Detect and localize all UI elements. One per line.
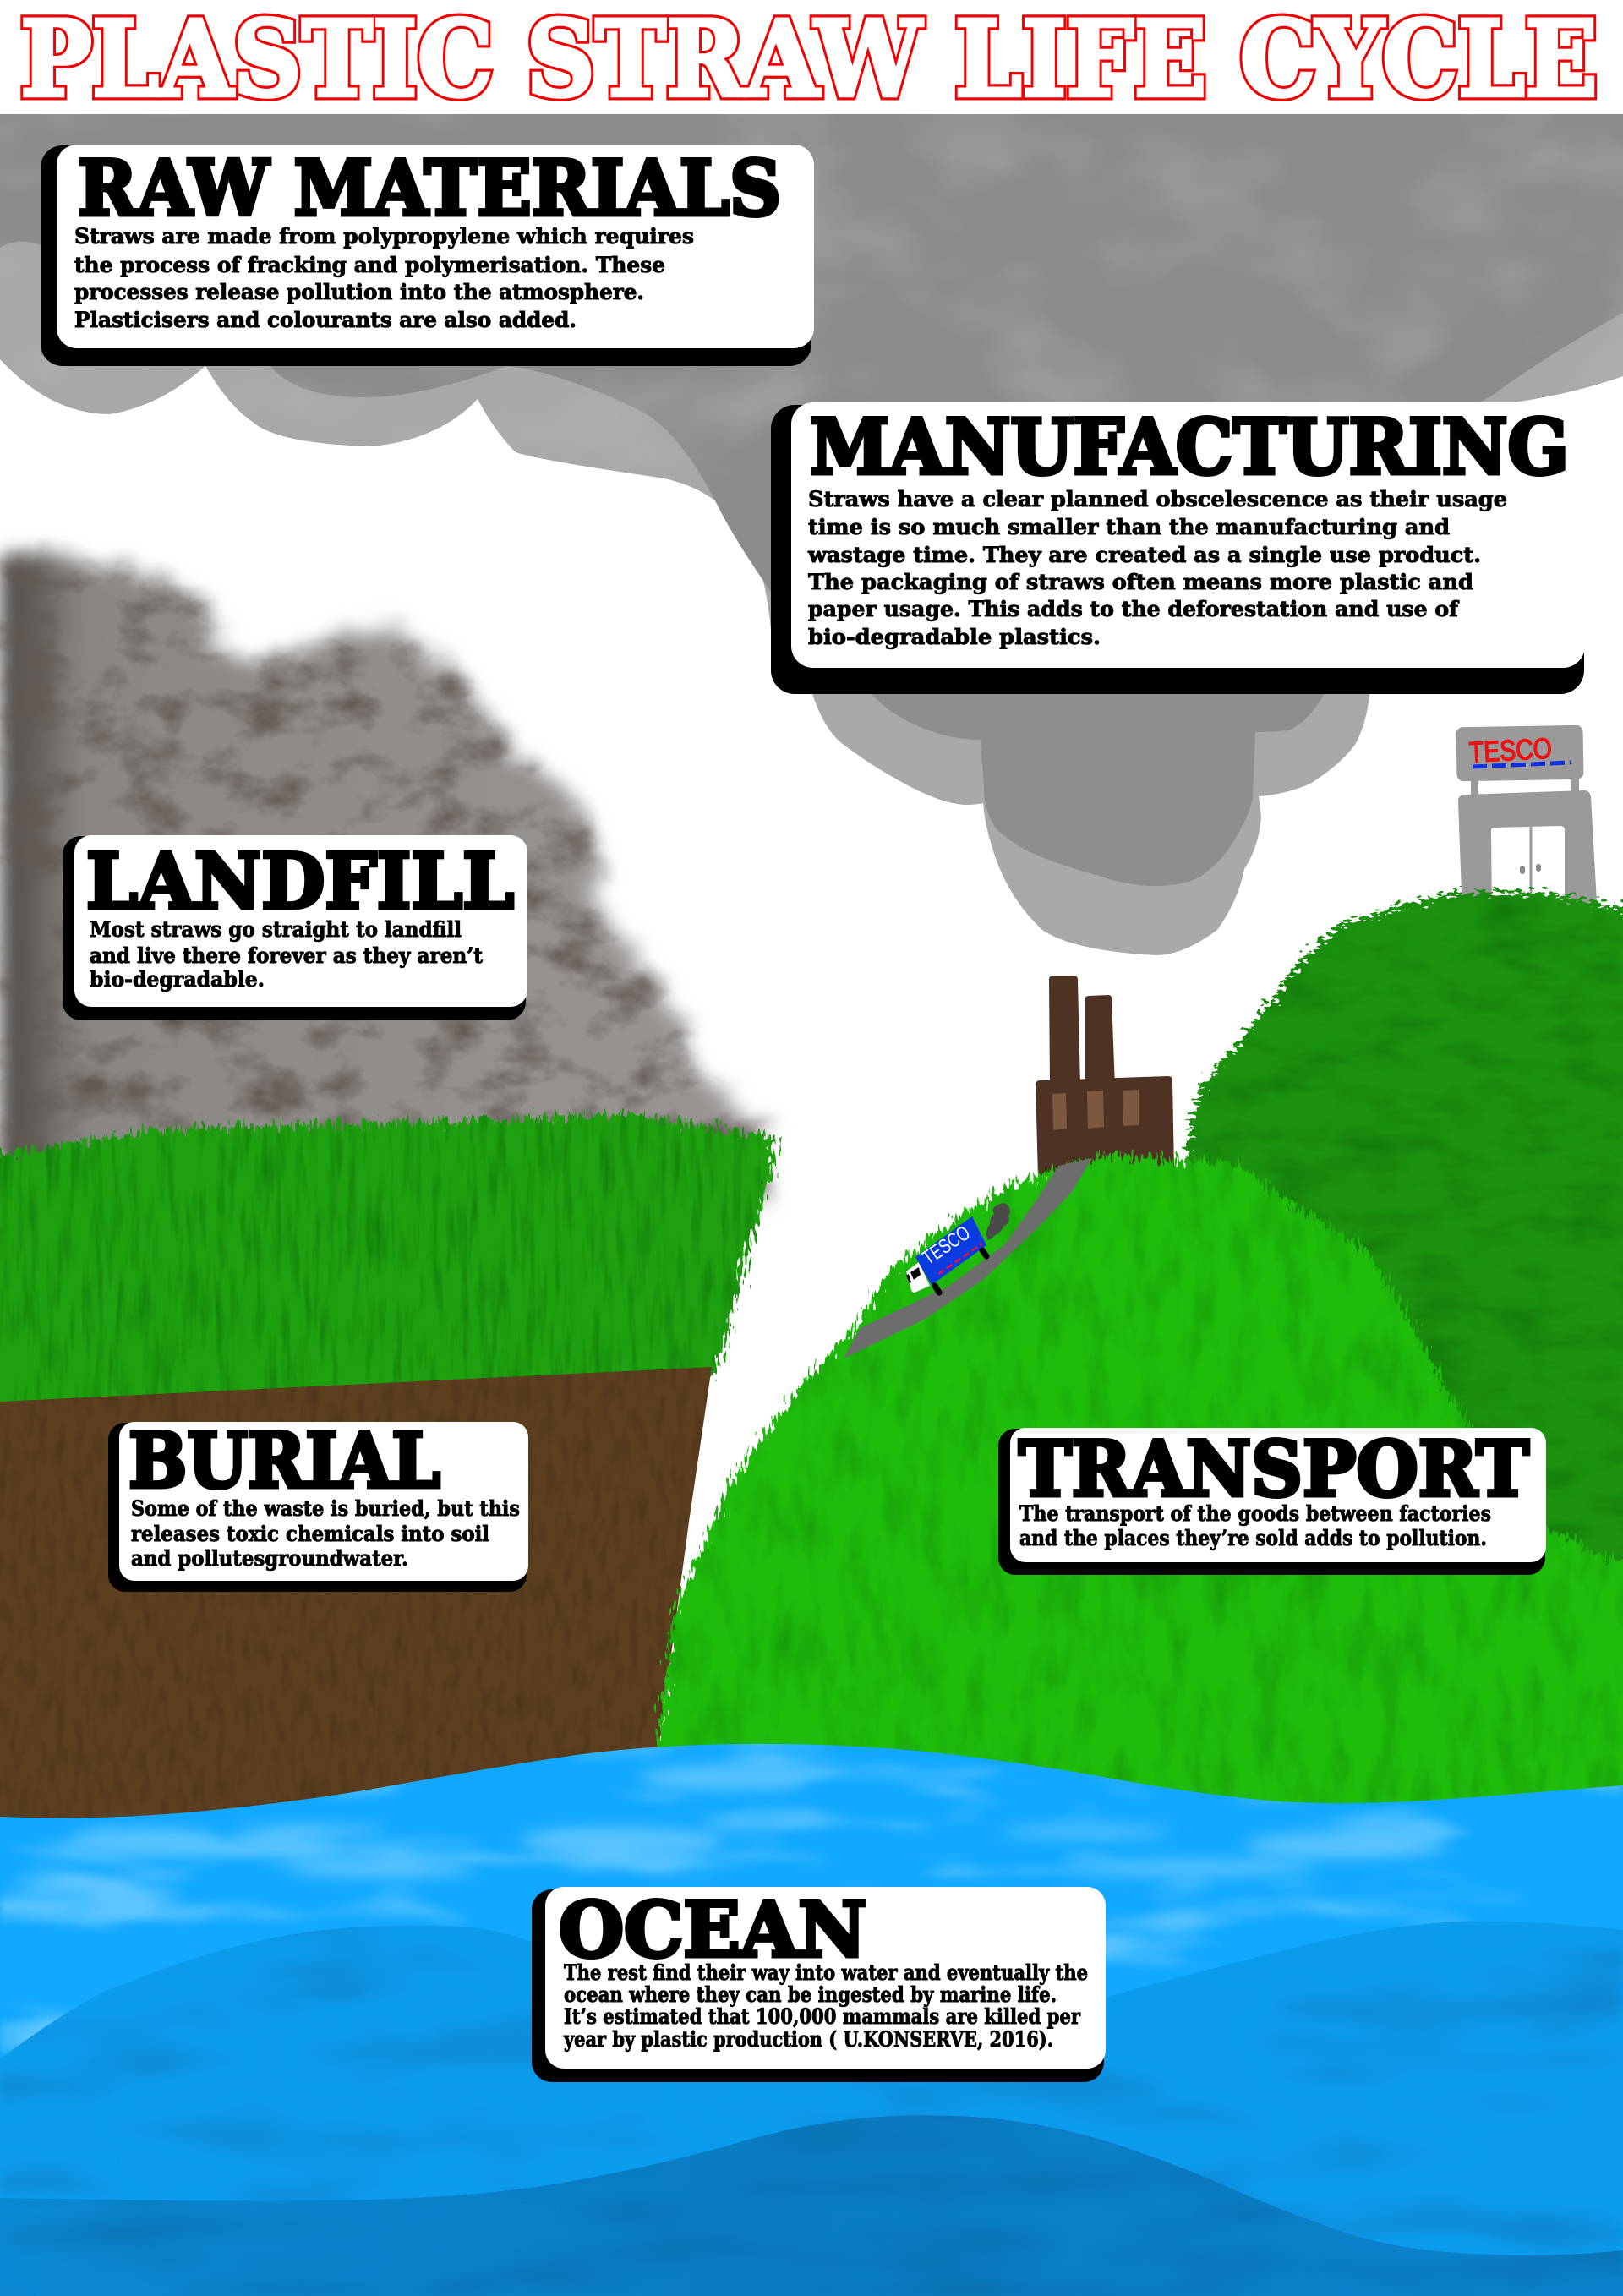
body text: releases toxic chemicals into soil (131, 1522, 489, 1546)
card face (57, 145, 814, 348)
landfill smoke cloud (0, 551, 765, 1200)
heading: BURIAL (128, 1416, 440, 1506)
heading: OCEAN (559, 1885, 866, 1975)
lower pollution cloud, dark layer (857, 676, 1333, 886)
truck wheels (935, 1250, 986, 1293)
body text: ocean where they can be ingested by marine life. (564, 1982, 1057, 2007)
chimney right (1085, 995, 1115, 1086)
body text: and the places they’re sold adds to pollution. (1019, 1526, 1487, 1550)
cab window (906, 1267, 921, 1283)
band background (0, 0, 1623, 114)
card face (74, 835, 527, 1007)
body text: and live there forever as they aren’t (90, 943, 483, 968)
body text: and pollutesgroundwater. (131, 1546, 408, 1571)
card shadow (532, 1889, 1104, 2082)
body text: The rest find their way into water and eventually the (564, 1960, 1088, 1985)
card shadow (771, 405, 1584, 694)
store sign (1456, 725, 1584, 781)
front hill (655, 1155, 1623, 1834)
card shadow (63, 836, 526, 1020)
body text: Plasticisers and colourants are also added. (74, 308, 577, 332)
body text: It’s estimated that 100,000 mammals are killed per (564, 2004, 1081, 2029)
ocean mid wave (0, 1921, 1623, 2296)
card shadow (41, 145, 812, 366)
body text: wastage time. They are created as a single use product. (807, 543, 1481, 567)
heading: MANUFACTURING (810, 402, 1569, 492)
road (844, 1158, 1092, 1358)
body text (1019, 1501, 1491, 1550)
truck trailer (915, 1216, 986, 1285)
body text: the process of fracking and polymerisation. These (74, 253, 665, 277)
body text: processes release pollution into the atmosphere. (74, 280, 644, 304)
icon: delivery truck (906, 1203, 1010, 1293)
card face (1010, 1428, 1546, 1562)
panel: ocean (532, 1885, 1106, 2082)
card shadow (998, 1429, 1545, 1575)
body text: The transport of the goods between factories (1019, 1501, 1491, 1526)
factory windows (1052, 1090, 1139, 1130)
icon: tesco store (1456, 725, 1598, 917)
body text (563, 1960, 1088, 2052)
door split (1530, 827, 1532, 917)
icon: factory (1036, 976, 1174, 1177)
heading: LANDFILL (86, 837, 514, 927)
top pollution cloud, dark layer (0, 114, 1623, 676)
store logo stripe (1473, 763, 1571, 767)
store logo text: TESCO (1468, 733, 1553, 769)
card face (791, 402, 1585, 668)
heading: TRANSPORT (1019, 1424, 1529, 1514)
top pollution cloud, light layer (0, 114, 1623, 676)
store sign posts (1471, 778, 1579, 797)
body text: year by plastic production ( U.KONSERVE, 2016). (563, 2027, 1053, 2052)
exhaust smoke (986, 1203, 1010, 1239)
body text: The packaging of straws often means more plastic and (808, 570, 1473, 594)
panel: burial (108, 1416, 528, 1592)
body text (74, 224, 694, 332)
body text: Straws have a clear planned obscelescence as their usage (808, 487, 1507, 511)
truck cab (906, 1262, 930, 1293)
body text: Straws are made from polypropylene which requires (74, 224, 694, 249)
body text: bio-degradable plastics. (808, 625, 1101, 649)
panel: transport (998, 1424, 1546, 1575)
truck logo text: TESCO (918, 1222, 975, 1270)
card shadow (108, 1423, 527, 1592)
heading: RAW MATERIALS (78, 144, 781, 233)
card face (119, 1422, 528, 1581)
body text: time is so much smaller than the manufacturing and (808, 515, 1450, 539)
body text: paper usage. This adds to the deforestation and use of (808, 597, 1460, 621)
truck logo stripe (938, 1244, 982, 1274)
ocean deep wave (0, 2115, 1623, 2296)
panel: landfill (63, 835, 527, 1020)
body text (807, 487, 1507, 649)
left grass cliff (0, 1114, 776, 1420)
store doors (1491, 826, 1565, 917)
card face (545, 1887, 1106, 2069)
chimney left (1049, 976, 1080, 1086)
body text (90, 917, 483, 992)
lower pollution cloud, light layer (807, 676, 1371, 955)
back hill (1183, 893, 1623, 1826)
body text: Most straws go straight to landfill (90, 917, 462, 942)
factory body (1036, 1076, 1174, 1177)
panel: raw materials (41, 144, 814, 366)
title band (0, 0, 1623, 121)
ocean highlights (68, 1766, 1447, 1877)
soil layer (0, 1367, 712, 1860)
ocean surface (0, 1744, 1623, 2296)
body text (131, 1496, 520, 1571)
panel: manufacturing (771, 402, 1585, 694)
door handles (1522, 866, 1538, 872)
body text: bio-degradable. (90, 967, 265, 992)
body text: Some of the waste is buried, but this (131, 1496, 520, 1521)
store building (1458, 790, 1598, 917)
